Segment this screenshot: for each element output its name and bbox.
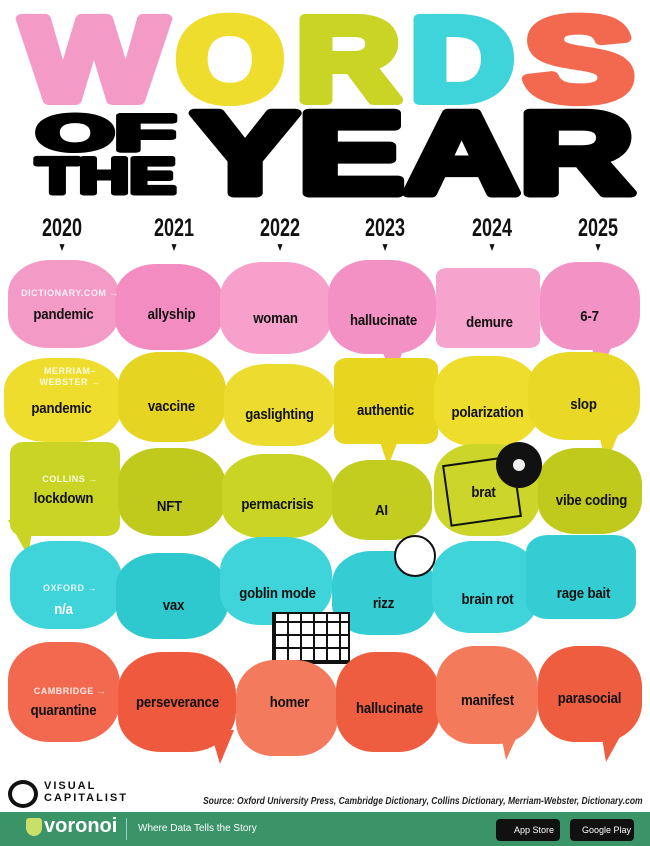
years (42, 214, 618, 254)
row: cambridge: hallucinate (356, 700, 423, 717)
row: cambridge: perseverance (136, 694, 219, 711)
icon: brat album square (442, 455, 522, 527)
row: oxford (10, 535, 636, 639)
label: merriam-webster (39, 366, 100, 387)
row: collins: NFT (157, 498, 182, 515)
row: cambridge: quarantine (31, 702, 96, 719)
title: OF (36, 105, 176, 161)
row: merriam-webster (4, 352, 640, 460)
row: cambridge: parasocial (558, 690, 621, 707)
years: ▼ (276, 240, 284, 254)
years: ▼ (381, 240, 389, 254)
row: dictionary.com: pandemic (33, 306, 94, 323)
row: collins (8, 442, 642, 550)
row: cambridge: homer (270, 694, 309, 711)
row: collins: brat (471, 484, 496, 501)
row: merriam-webster: gaslighting (245, 406, 314, 423)
app store button: App Store (514, 825, 554, 835)
app store button (496, 819, 560, 841)
row: cambridge: manifest (461, 692, 514, 709)
label: cambridge: CAMBRIDGE → (34, 686, 106, 696)
row: dictionary.com: woman (253, 310, 298, 327)
row: oxford: rage bait (557, 585, 610, 602)
row: dictionary.com: 6-7 (580, 308, 599, 325)
years: ▼ (58, 240, 66, 254)
row: oxford: rizz (373, 595, 394, 612)
footer (0, 812, 650, 846)
row: collins: lockdown (34, 490, 93, 507)
years: ▼ (488, 240, 496, 254)
years: ▼ (594, 240, 602, 254)
row: dictionary.com: demure (466, 314, 513, 331)
row: merriam-webster: authentic (357, 402, 414, 419)
label: collins: COLLINS → (42, 474, 98, 484)
row: collins: AI (375, 502, 388, 519)
row: dictionary.com: hallucinate (350, 312, 417, 329)
label: merriam-webster: WEBSTER → (39, 377, 100, 387)
row: oxford: n/a (54, 601, 73, 618)
years: 2025 (578, 214, 618, 242)
row: merriam-webster: vaccine (148, 398, 195, 415)
years: 2020 (42, 214, 82, 242)
google play button: Google Play (582, 825, 631, 835)
source: Source: Oxford University Press, Cambridge Dictionary, Collins Dictionary, Merriam-Webster, Dictionary.com (203, 796, 643, 807)
row: cambridge (8, 642, 642, 764)
row: collins: permacrisis (241, 496, 314, 513)
icon: crossword grid (272, 612, 350, 664)
label: dictionary.com: DICTIONARY.COM → (21, 288, 119, 298)
row: merriam-webster: slop (570, 396, 597, 413)
years: 2021 (154, 214, 194, 242)
title (16, 0, 637, 205)
row: collins: vibe coding (556, 492, 627, 509)
footer: voronoi (44, 815, 117, 837)
row: merriam-webster: pandemic (31, 400, 92, 417)
years: 2022 (260, 214, 300, 242)
icon: vinyl (496, 442, 542, 488)
label: oxford: OXFORD → (43, 583, 97, 593)
row: dictionary.com (8, 260, 640, 358)
years: 2024 (472, 214, 512, 242)
google play button (570, 819, 634, 841)
title: THE (36, 148, 176, 204)
row: oxford: brain rot (462, 591, 513, 608)
icon: thinking face (394, 535, 436, 577)
row: dictionary.com: allyship (148, 306, 195, 323)
row: oxford: goblin mode (239, 585, 316, 602)
row: oxford: vax (163, 597, 184, 614)
logo: visual capitalist (8, 780, 128, 808)
years: ▼ (170, 240, 178, 254)
row: merriam-webster: polarization (452, 404, 523, 421)
logo: visual capitalist: CAPITALIST (44, 792, 128, 804)
label: merriam-webster: MERRIAM– (44, 366, 96, 376)
footer: Where Data Tells the Story (138, 823, 257, 834)
years: 2023 (365, 214, 405, 242)
logo: visual capitalist: VISUAL (44, 780, 96, 792)
